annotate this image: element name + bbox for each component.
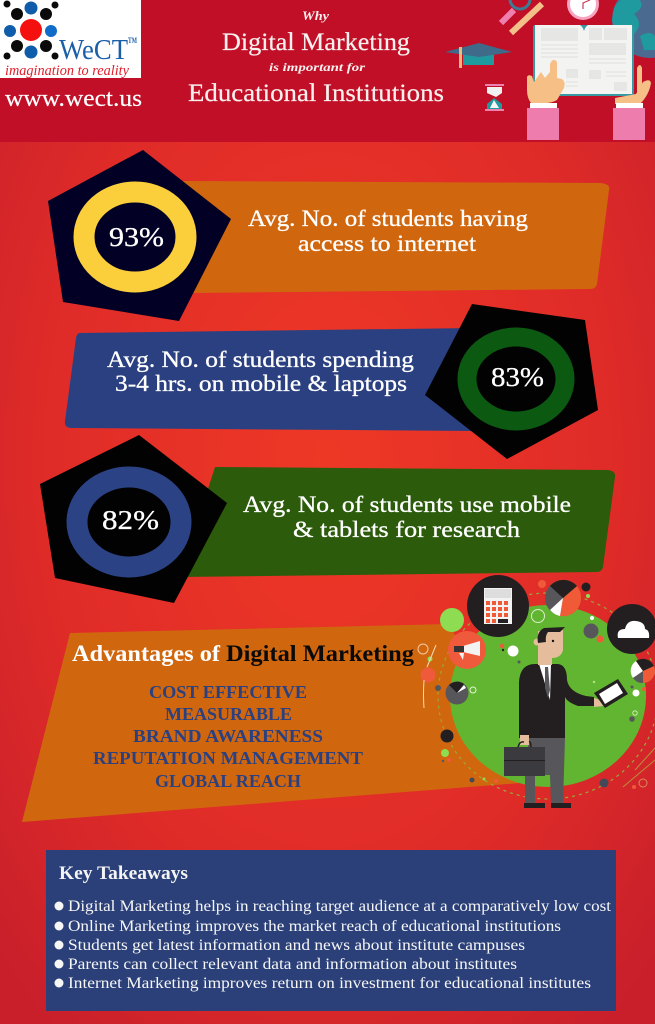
orange banner: [180, 181, 609, 293]
icon: hourglass: [485, 84, 504, 111]
value: 82%: [102, 505, 159, 535]
title: Educational Institutions: [188, 80, 444, 107]
description: [243, 492, 571, 542]
decorative dots: [418, 580, 647, 789]
icon: magnifier and ruler: [501, 0, 542, 33]
advantages list: REPUTATION MANAGEMENT: [93, 748, 363, 768]
icon: pie chart top: [545, 580, 581, 616]
bullet list: Students get latest information and news about institute campuses: [68, 937, 525, 954]
illustration: businessman with icons: [418, 575, 655, 808]
panel: stat 93 percent: [48, 150, 609, 321]
logo: imagination to reality: [5, 63, 129, 79]
panel: advantages: [22, 624, 520, 822]
icon: pie chart left: [446, 682, 468, 704]
value: 83%: [491, 362, 544, 392]
pentagon badge: [48, 150, 231, 321]
pentagon badge: [40, 435, 227, 603]
green ring: [467, 337, 565, 421]
description: Avg. No. of students use mobile: [243, 492, 571, 517]
bullet list: Parents can collect relevant data and information about institutes: [68, 956, 517, 973]
title: [188, 8, 444, 107]
advantages list: BRAND AWARENESS: [133, 726, 323, 746]
title: Digital Marketing: [222, 29, 411, 56]
panel: stat 83 percent: [65, 304, 598, 459]
yellow ring: [84, 192, 186, 282]
heading: Advantages of: [72, 641, 220, 666]
icon: pie chart right: [631, 659, 655, 683]
advantages list: MEASURABLE: [165, 704, 292, 724]
logo: TM: [128, 36, 137, 45]
green circle: [450, 605, 646, 787]
blue banner: [65, 328, 475, 431]
bullet list: Internet Marketing improves return on investment for educational institutes: [68, 975, 591, 992]
advantages list: [93, 682, 363, 791]
description: access to internet: [298, 231, 477, 256]
icon: cloud: [607, 604, 655, 654]
businessman: [504, 627, 628, 808]
blue ring: [77, 477, 181, 567]
description: Avg. No. of students spending: [107, 347, 415, 372]
value: 93%: [109, 222, 164, 252]
bullet list: Digital Marketing helps in reaching target audience at a comparatively low cost: [68, 898, 612, 915]
icon: megaphone: [448, 631, 486, 669]
bullet list: [54, 898, 612, 992]
green banner: [180, 467, 615, 577]
title: Why: [302, 8, 329, 23]
description: Avg. No. of students having: [248, 206, 529, 231]
dashed orbit: [438, 593, 655, 799]
header band: [0, 0, 655, 142]
panel: stat 82 percent: [40, 435, 615, 603]
advantages list: GLOBAL REACH: [155, 771, 301, 791]
title: is important for: [269, 60, 365, 74]
heading: Key Takeaways: [59, 863, 188, 884]
description: & tablets for research: [293, 517, 521, 542]
heading: [72, 641, 415, 666]
icon: graduation cap: [445, 43, 512, 68]
icon: calculator: [467, 575, 529, 637]
bullet list: Online Marketing improves the market reach of educational institutions: [68, 918, 561, 935]
orange shape: [22, 624, 520, 822]
heading: Digital Marketing: [226, 641, 415, 666]
icon: clock: [567, 0, 599, 20]
advantages list: COST EFFECTIVE: [149, 682, 307, 702]
website url: www.wect.us: [5, 86, 142, 112]
description: [107, 347, 415, 396]
logo: [0, 0, 141, 79]
pentagon badge: [425, 304, 598, 459]
icon: globe: [612, 0, 655, 58]
panel: key takeaways: [46, 850, 616, 1011]
description: 3-4 hrs. on mobile & laptops: [115, 371, 407, 396]
icon: open book with hands: [527, 25, 651, 140]
description: [248, 206, 529, 256]
corner accent lines: [623, 748, 655, 787]
logo: WeCT: [59, 34, 128, 66]
